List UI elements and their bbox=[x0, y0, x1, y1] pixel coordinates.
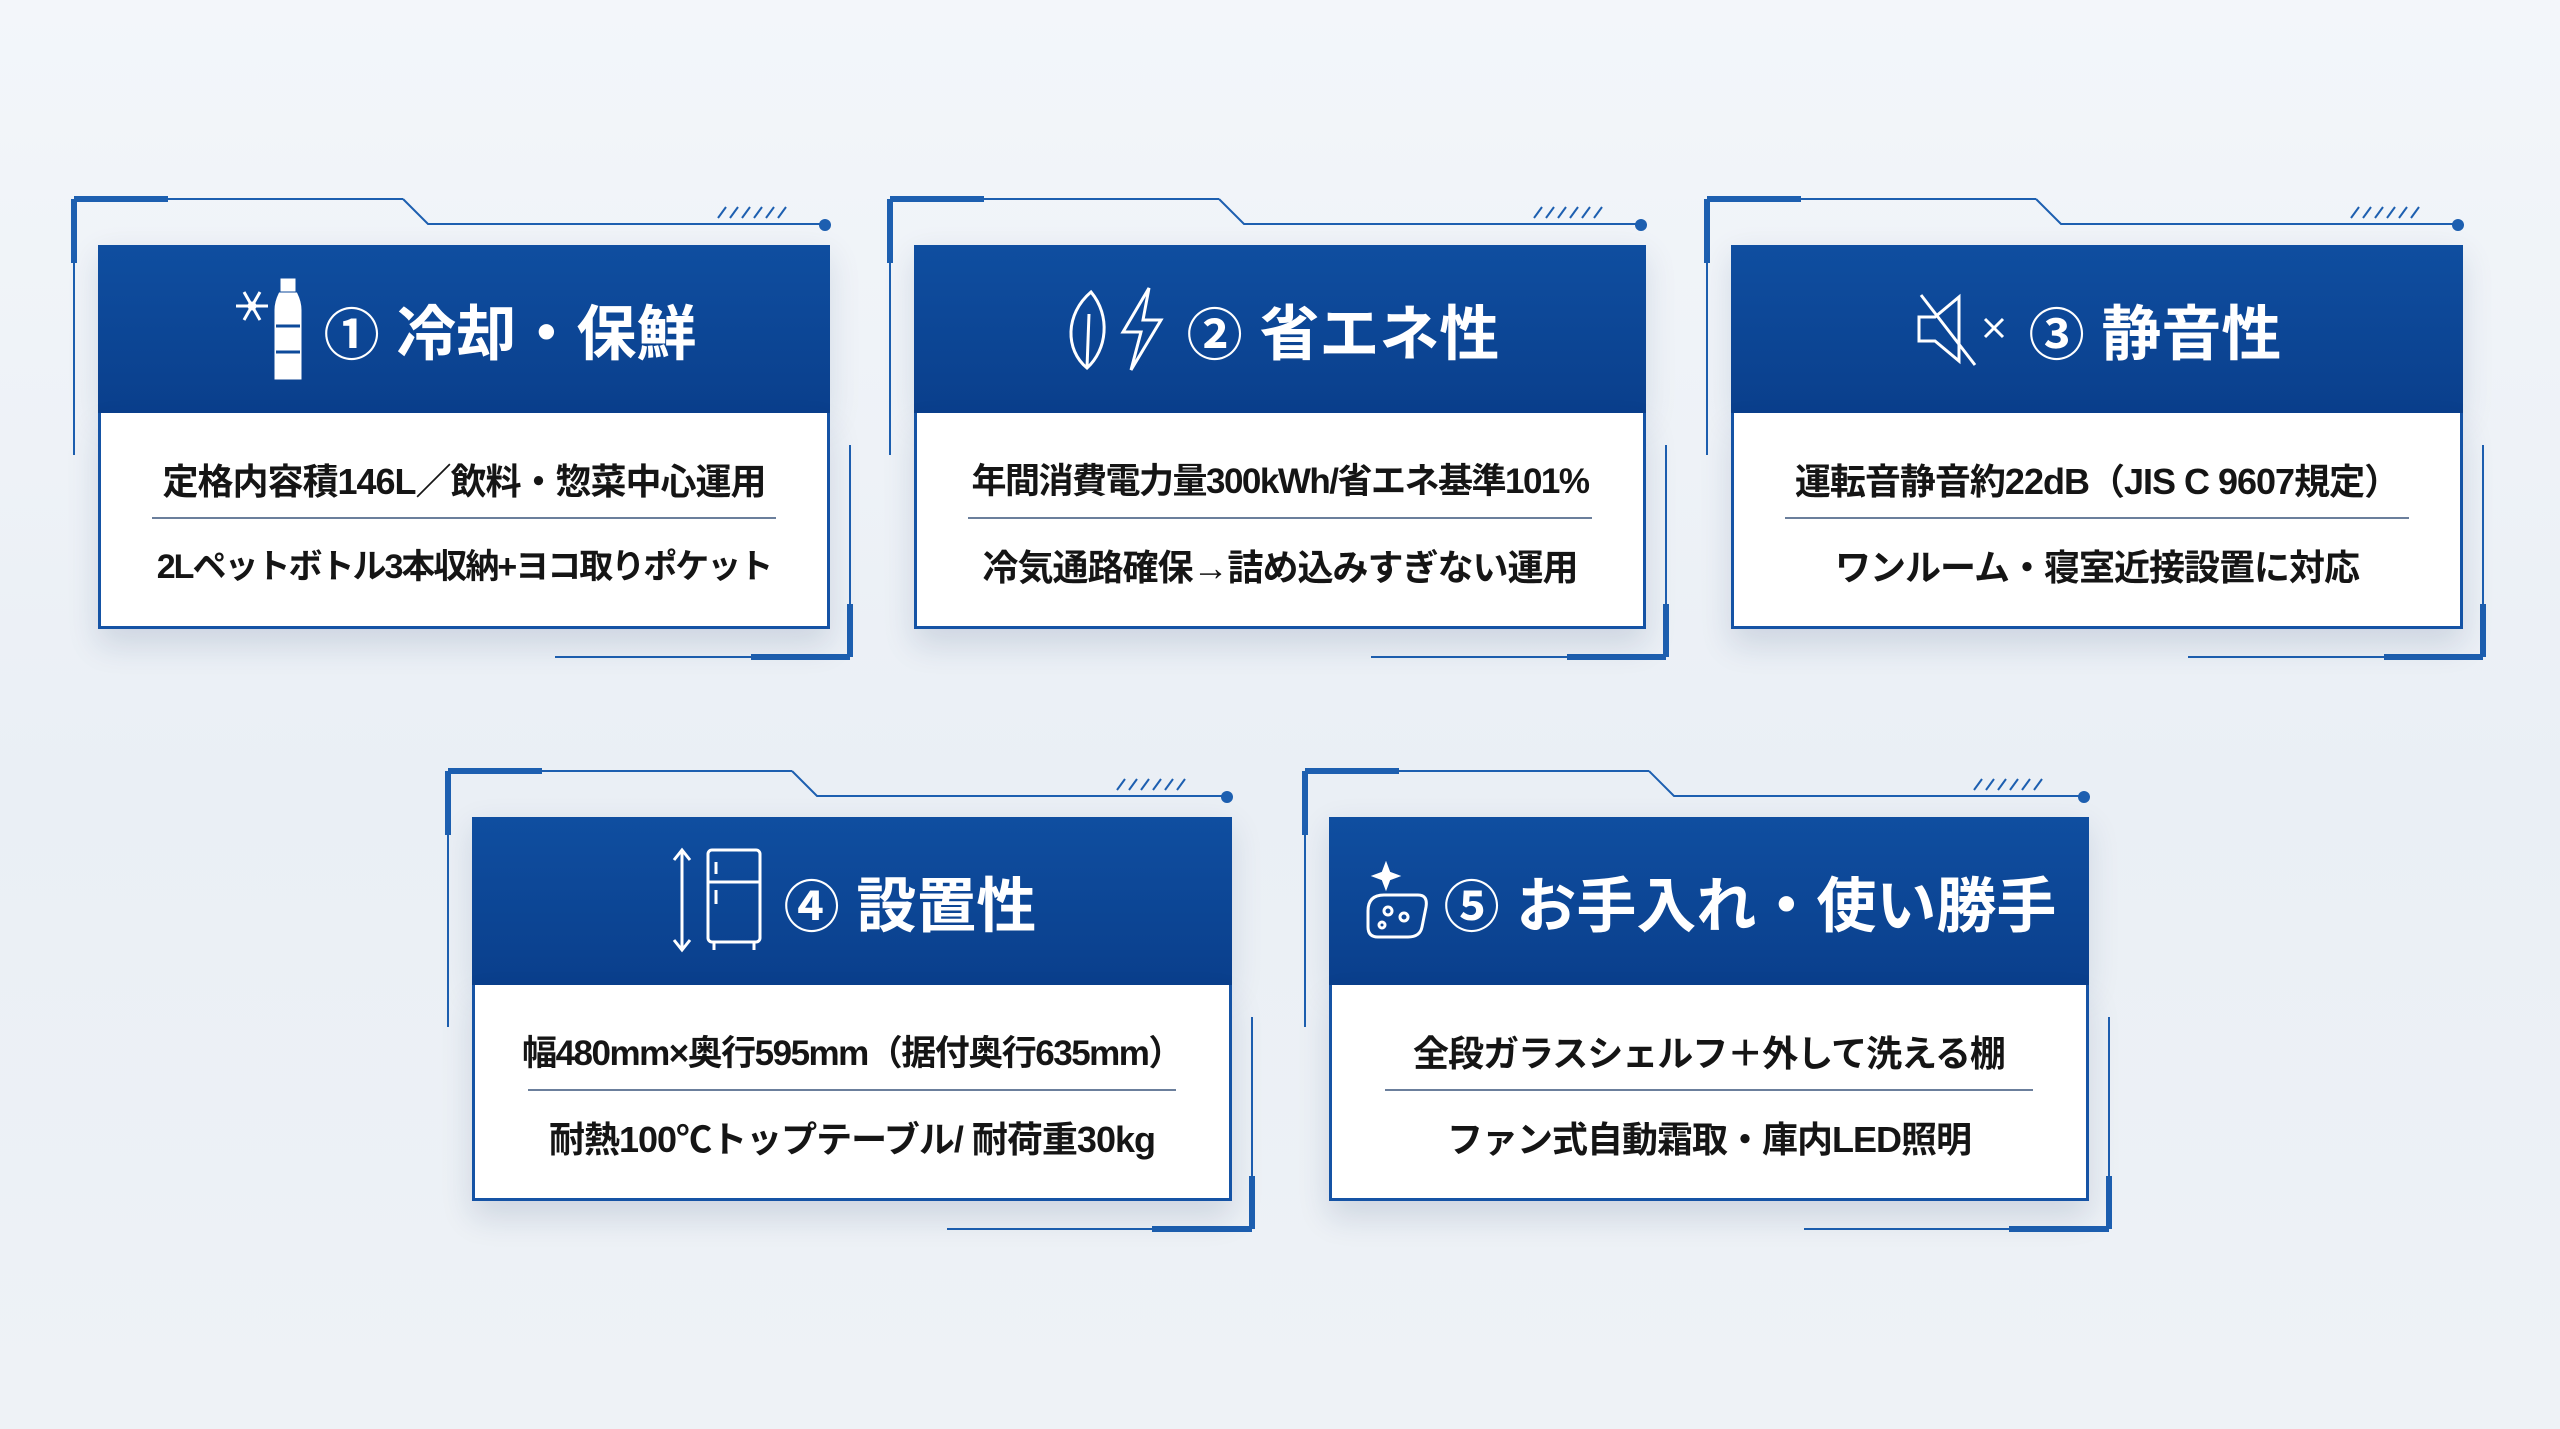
card 3: quietness bbox=[1704, 196, 2486, 660]
header bbox=[472, 817, 1232, 985]
body text: 冷気通路確保→詰め込みすぎない運用 bbox=[982, 547, 1578, 588]
body text bbox=[914, 413, 1646, 629]
body text: 2Lペットボトル3本収納+ヨコ取りポケット bbox=[157, 548, 771, 586]
header bbox=[98, 245, 830, 413]
body text: ファン式自動霜取・庫内LED照明 bbox=[1447, 1119, 1971, 1160]
body text: 運転音静音約22dB（JIS C 9607規定） bbox=[1795, 461, 2399, 502]
icon: fridge with height arrow bbox=[672, 848, 762, 952]
body text bbox=[98, 413, 830, 629]
body text: 耐熱100℃トップテーブル/ 耐荷重30kg bbox=[549, 1119, 1155, 1160]
header bbox=[914, 245, 1646, 413]
body text bbox=[472, 985, 1232, 1201]
icon: muted speaker bbox=[1918, 294, 2004, 366]
icon: leaf and bolt bbox=[1070, 287, 1164, 371]
card 4: installation bbox=[445, 768, 1255, 1232]
card 5: maintenance bbox=[1302, 768, 2112, 1232]
body text: 幅480mm×奥行595mm（据付奥行635mm） bbox=[522, 1034, 1182, 1073]
card 1: cooling bbox=[71, 196, 853, 660]
body text: 全段ガラスシェルフ＋外して洗える棚 bbox=[1413, 1033, 2005, 1074]
body text: 定格内容積146L／飲料・惣菜中心運用 bbox=[162, 461, 766, 502]
body text: ワンルーム・寝室近接設置に対応 bbox=[1835, 547, 2359, 588]
header bbox=[1329, 817, 2089, 985]
header: ① 冷却・保鮮 bbox=[324, 300, 696, 368]
body text bbox=[1731, 413, 2463, 629]
header: ④ 設置性 bbox=[784, 872, 1036, 940]
header: ⑤ お手入れ・使い勝手 bbox=[1444, 872, 2056, 940]
header bbox=[1731, 245, 2463, 413]
header: ③ 静音性 bbox=[2029, 300, 2281, 368]
body text: 年間消費電力量300kWh/省エネ基準101% bbox=[971, 462, 1589, 501]
icon: sponge with sparkles bbox=[1366, 861, 1428, 938]
icon: snowflake and bottle bbox=[236, 278, 302, 380]
body text bbox=[1329, 985, 2089, 1201]
header: ② 省エネ性 bbox=[1187, 300, 1499, 368]
card 2: energy saving bbox=[887, 196, 1669, 660]
